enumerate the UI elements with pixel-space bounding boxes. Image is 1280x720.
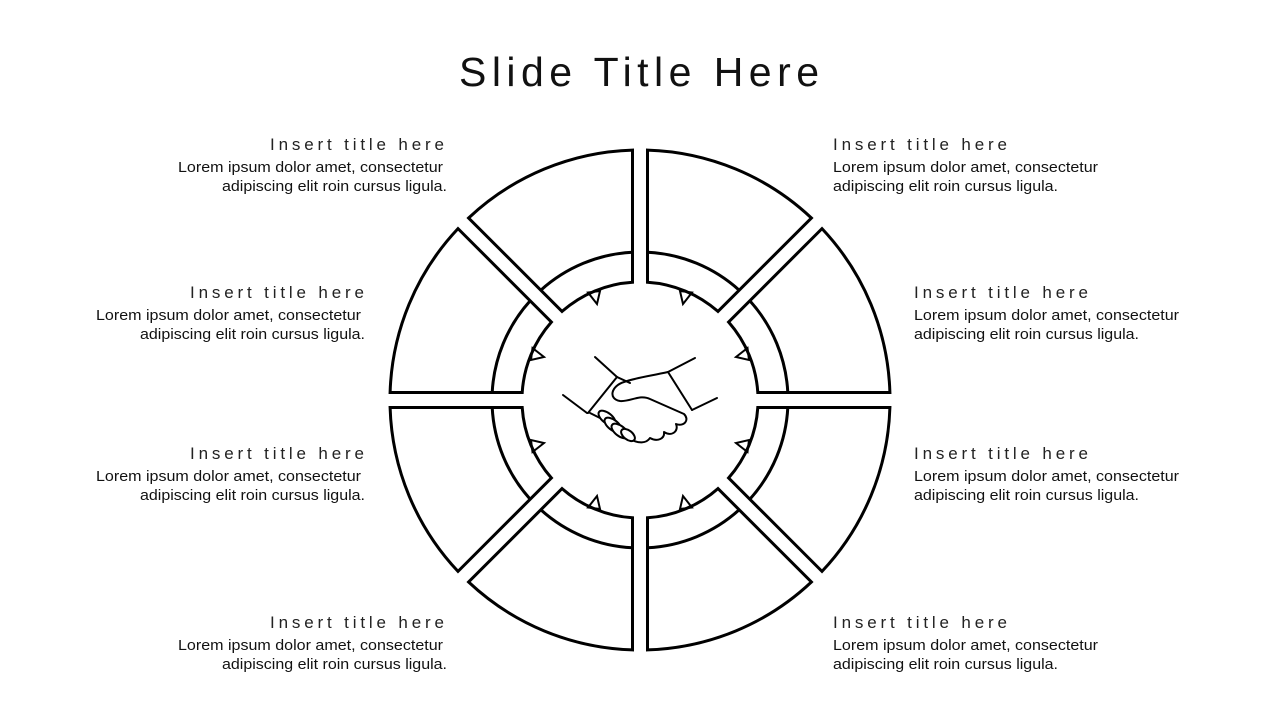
- text block: bottom left: Insert title here: [270, 613, 444, 632]
- text block: upper left: Insert title here: [190, 283, 364, 302]
- title: Slide Title Here: [459, 49, 819, 95]
- text block: top left: Insert title here: [270, 135, 444, 154]
- text block: bottom right: Insert title here: [833, 613, 1007, 632]
- segment: top left: [648, 489, 811, 650]
- text block: bottom left: adipiscing elit roin cursus ligula.: [222, 656, 447, 673]
- segment: left lower: [729, 229, 890, 392]
- text block: lower left: adipiscing elit roin cursus ligula.: [140, 487, 365, 504]
- text block: lower right: adipiscing elit roin cursus ligula.: [914, 487, 1139, 504]
- text block: top right: Lorem ipsum dolor amet, consectetur: [833, 159, 1098, 176]
- segment: bottom right: [469, 150, 632, 311]
- text block: bottom left: [178, 613, 447, 673]
- text block: top right: [833, 135, 1098, 195]
- text block: top left: Lorem ipsum dolor amet, consectetur: [178, 159, 443, 176]
- text block: upper left: Lorem ipsum dolor amet, consectetur: [96, 307, 361, 324]
- text block: top right: adipiscing elit roin cursus ligula.: [833, 178, 1058, 195]
- text block: top left: adipiscing elit roin cursus ligula.: [222, 178, 447, 195]
- icon: handshake: [563, 357, 717, 443]
- segment: right upper: [390, 408, 551, 571]
- text block: bottom right: [833, 613, 1098, 673]
- wheel diagram: [390, 150, 890, 650]
- text block: lower right: [914, 444, 1179, 504]
- text block: lower right: Lorem ipsum dolor amet, consectetur: [914, 468, 1179, 485]
- text block: lower left: Insert title here: [190, 444, 364, 463]
- text block: upper left: adipiscing elit roin cursus ligula.: [140, 326, 365, 343]
- segment: left upper: [390, 229, 551, 392]
- segment: top right upper: [648, 150, 811, 311]
- text block: upper right: Lorem ipsum dolor amet, consectetur: [914, 307, 1179, 324]
- text block: upper right: Insert title here: [914, 283, 1088, 302]
- segment: right lower: [729, 408, 890, 571]
- text block: bottom right: Lorem ipsum dolor amet, consectetur: [833, 637, 1098, 654]
- text block: bottom right: adipiscing elit roin cursus ligula.: [833, 656, 1058, 673]
- text block: upper left: [96, 283, 365, 343]
- text block: top right: Insert title here: [833, 135, 1007, 154]
- text block: lower left: [96, 444, 365, 504]
- text block: lower right: Insert title here: [914, 444, 1088, 463]
- text block: upper right: adipiscing elit roin cursus ligula.: [914, 326, 1139, 343]
- segment: bottom left: [469, 489, 632, 650]
- text block: lower left: Lorem ipsum dolor amet, consectetur: [96, 468, 361, 485]
- text block: bottom left: Lorem ipsum dolor amet, consectetur: [178, 637, 443, 654]
- text block: upper right: [914, 283, 1179, 343]
- text block: top left: [178, 135, 447, 195]
